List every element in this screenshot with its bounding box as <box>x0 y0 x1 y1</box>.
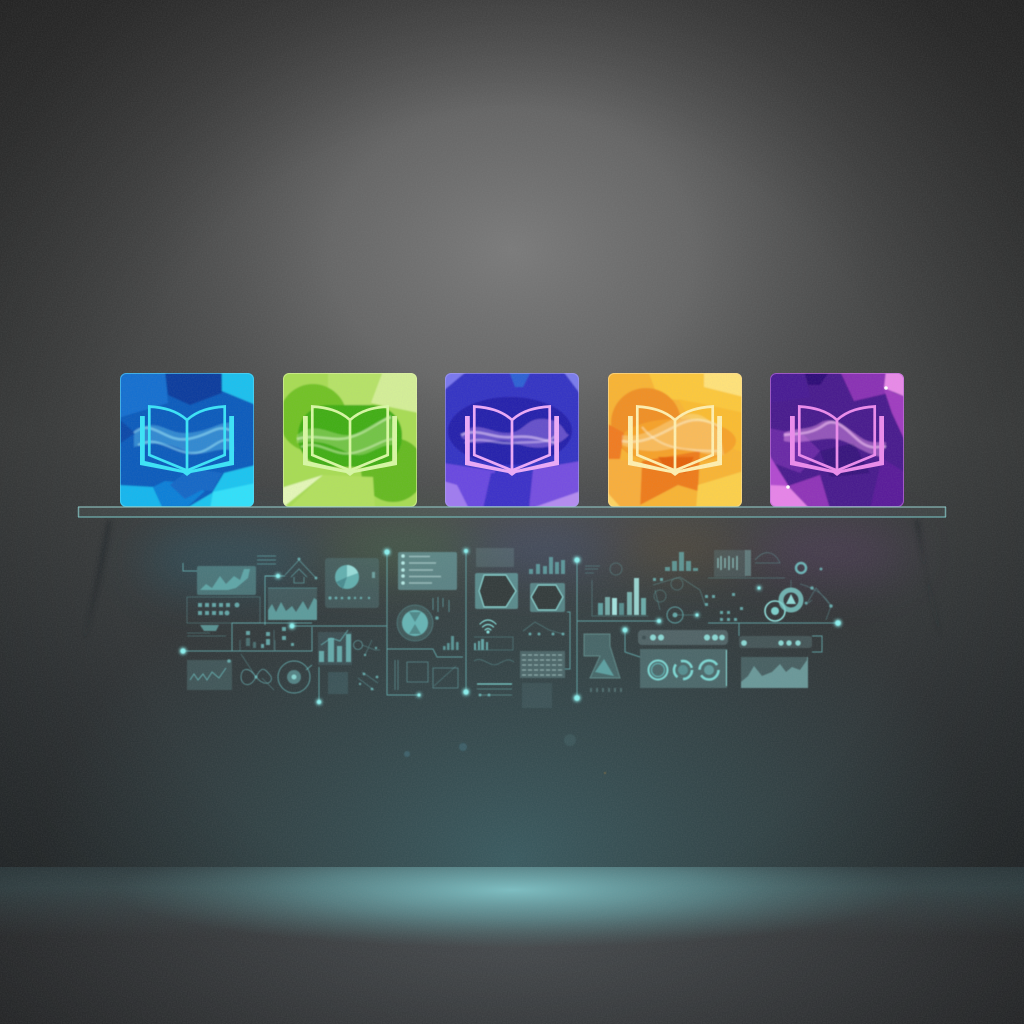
equalizer panel <box>708 550 785 578</box>
tile 3: indigo book <box>443 371 581 509</box>
placeholder glyph row <box>591 688 621 692</box>
panel: noise matrix <box>476 548 514 567</box>
pill header two <box>739 636 812 648</box>
hexagon panels <box>475 573 565 612</box>
panel: area chart <box>268 588 317 620</box>
floor with teal light pool <box>0 867 1024 1024</box>
icon: house network <box>285 558 318 583</box>
panel: trend chart <box>197 556 276 595</box>
angular panel <box>584 634 620 678</box>
coloured glow under shelf <box>140 522 910 594</box>
panel: status list <box>398 552 457 590</box>
tile 4: orange book <box>606 371 744 509</box>
tile 2: green book <box>283 373 417 507</box>
bar chart: centre right <box>585 563 648 616</box>
mini widgets column <box>474 637 514 696</box>
panel: stacked bars <box>240 627 352 665</box>
holographic data dashboard <box>180 548 841 774</box>
bar chart: top centre <box>529 557 565 574</box>
circuit cluster <box>653 577 743 623</box>
panel: squares grid <box>187 597 260 636</box>
panel: pie chart <box>325 558 379 608</box>
target circles and triangle <box>757 563 833 621</box>
tile 1: blue book <box>118 371 256 509</box>
schematic panel <box>395 660 458 690</box>
radial dial <box>278 661 310 693</box>
panel: line chart <box>187 659 232 690</box>
network nodes <box>328 640 380 694</box>
stray light specks <box>404 734 606 774</box>
pill header with dots <box>638 630 728 645</box>
small bar chart <box>443 636 459 650</box>
panel: three gauges <box>640 649 727 688</box>
infinity diagram <box>241 654 274 690</box>
data table panel <box>520 612 570 708</box>
tile 5: purple book <box>768 371 906 509</box>
molecule nodes <box>523 622 564 636</box>
glass shelf <box>78 507 946 517</box>
panel: mountain chart <box>741 657 808 688</box>
icon: wifi <box>480 620 496 633</box>
radial wheel gauge <box>397 597 449 641</box>
small bar chart: top <box>665 552 698 571</box>
shelf bracket shadows <box>84 520 942 640</box>
connector lines and nodes <box>180 549 841 704</box>
